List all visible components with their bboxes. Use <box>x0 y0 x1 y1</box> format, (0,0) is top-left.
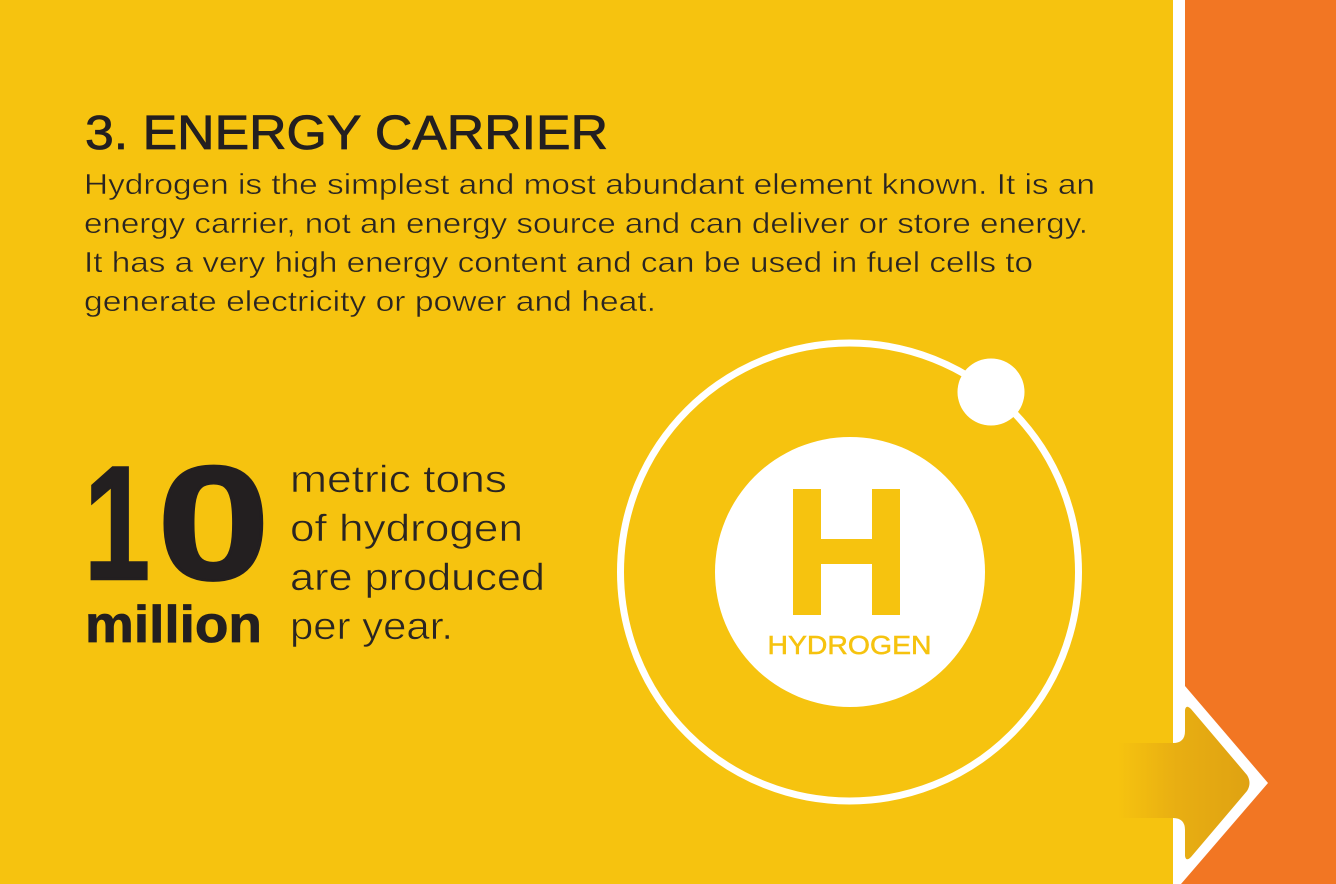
hydrogen label: HYDROGEN <box>768 632 932 660</box>
intro text block <box>84 169 1095 318</box>
electron <box>958 358 1024 426</box>
statistic description <box>290 459 545 648</box>
statistic description: metric tons <box>290 459 507 501</box>
intro text block: energy carrier, not an energy source and can deliver or store energy. <box>84 208 1088 240</box>
statistic description: are produced <box>290 557 545 599</box>
heading: 3. ENERGY CARRIER <box>85 107 608 160</box>
orange side panel <box>1173 0 1336 884</box>
intro text block: Hydrogen is the simplest and most abundant element known. It is an <box>84 169 1095 201</box>
nucleus <box>715 437 985 707</box>
hydrogen atom diagram <box>620 343 1078 801</box>
intro text block: It has a very high energy content and can be used in fuel cells to <box>84 247 1033 279</box>
statistic description: of hydrogen <box>290 508 523 550</box>
statistic: 10 million: 1 <box>84 433 150 614</box>
orbit ring <box>620 343 1078 801</box>
statistic: 10 million: 0 <box>157 433 270 614</box>
statistic: 10 million: million <box>85 596 262 654</box>
statistic description: per year. <box>290 606 453 648</box>
H symbol <box>793 489 900 615</box>
intro text block: generate electricity or power and heat. <box>84 286 656 318</box>
arrow <box>1118 707 1250 859</box>
statistic: 10 million <box>84 433 270 654</box>
